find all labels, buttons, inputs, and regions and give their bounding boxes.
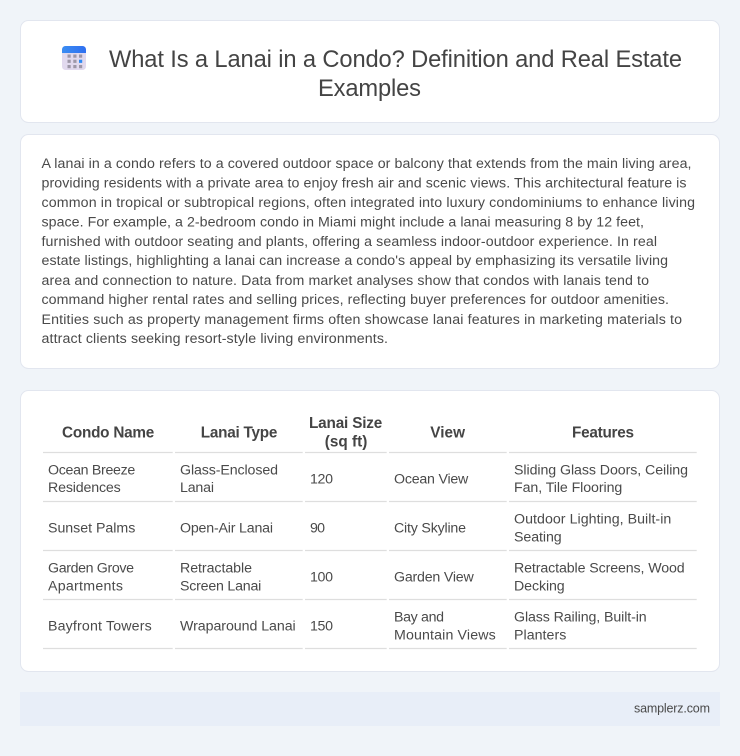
title: What Is a Lanai in a Condo? Definition and Real Estate — [109, 47, 682, 73]
table row: Ocean Breeze Residences: Ocean Breeze — [48, 462, 135, 478]
table row: Ocean Breeze Residences: Lanai — [180, 480, 214, 496]
footer credit: samplerz.com — [634, 702, 710, 716]
table row: Ocean Breeze Residences: 120 — [310, 472, 333, 488]
table header row: Features — [572, 425, 634, 442]
table row: Sunset Palms: Seating — [514, 530, 562, 546]
table header row: View — [430, 425, 465, 442]
panel: condo table — [20, 390, 720, 672]
table row: Garden Grove Apartments: Retractable Screens, Wood — [514, 560, 685, 576]
table row: Sunset Palms: City Skyline — [394, 521, 466, 537]
table row: Garden Grove Apartments: Apartments — [48, 578, 123, 594]
table row: Ocean Breeze Residences: Ocean View — [394, 472, 469, 488]
table row: Bayfront Towers: Planters — [514, 628, 566, 644]
table row: Sunset Palms — [48, 511, 671, 546]
table row: Sunset Palms: 90 — [310, 521, 325, 537]
text block: definition — [42, 156, 695, 347]
table header row — [62, 415, 634, 451]
table row: Ocean Breeze Residences: Glass-Enclosed — [180, 462, 278, 478]
table row: Bayfront Towers: Mountain Views — [394, 628, 496, 644]
title — [109, 47, 682, 102]
text block: definition: A lanai in a condo refers to a covered outdoor space or balcony that extends from the main living area, — [42, 156, 692, 172]
panel: definition paragraph — [20, 134, 720, 368]
text block: definition: providing residents with a private area to enjoy fresh air and scenic views. This architectural feature is — [42, 176, 686, 192]
table row: Bayfront Towers — [48, 610, 647, 644]
text block: definition: common in tropical or subtropical regions, often integrated into luxury condominiums to enhance living — [42, 195, 695, 211]
text block: definition: space. For example, a 2-bedroom condo in Miami might include a lanai measuring 8 by 12 feet, — [42, 214, 644, 230]
text block: definition: attract clients seeking resort-style living environments. — [42, 331, 388, 347]
title: Examples — [318, 76, 421, 102]
text block: definition: furnished with outdoor seating and plants, offering a seamless indoor-outdoor experience. In real — [42, 234, 657, 250]
table header row: Condo Name — [62, 425, 154, 442]
icon: calendar — [62, 46, 86, 70]
table row: Bayfront Towers: Glass Railing, Built-in — [514, 610, 647, 626]
table row: Garden Grove Apartments: Retractable — [180, 560, 252, 576]
table row: Garden Grove Apartments: Screen Lanai — [180, 578, 261, 594]
table row: Ocean Breeze Residences — [48, 462, 688, 496]
table row: Bayfront Towers: Bay and — [394, 610, 444, 626]
text block: definition: command higher rental rates and selling prices, reflecting buyer preferences for outdoor amenities. — [42, 292, 669, 308]
table row: Sunset Palms: Open-Air Lanai — [180, 521, 273, 537]
table row: Sunset Palms: Outdoor Lighting, Built-in — [514, 511, 671, 527]
table row: Garden Grove Apartments: Garden View — [394, 570, 474, 586]
table row: Garden Grove Apartments: 100 — [310, 570, 333, 586]
table header row: Lanai Type — [201, 425, 277, 442]
table row: Ocean Breeze Residences: Residences — [48, 480, 121, 496]
text block: definition: area and connection to nature. Data from market analyses show that condos with lanais tend to — [42, 273, 649, 289]
table row: Sunset Palms: Sunset Palms — [48, 521, 135, 537]
table row: Bayfront Towers: Bayfront Towers — [48, 618, 152, 634]
table row: Ocean Breeze Residences: Sliding Glass Doors, Ceiling — [514, 462, 688, 478]
table header row: (sq ft) — [325, 434, 367, 451]
panel: title card — [20, 20, 720, 122]
text block: definition: Entities such as property management firms often showcase lanai features in marketing materials to — [42, 312, 682, 328]
table row: Garden Grove Apartments — [48, 560, 685, 594]
table row: Garden Grove Apartments: Decking — [514, 578, 565, 594]
text block: definition: estate listings, highlighting a lanai can increase a condo's appeal by emphasizing its versatile living — [42, 253, 668, 269]
table row: Garden Grove Apartments: Garden Grove — [48, 560, 134, 576]
footer bar — [20, 692, 720, 726]
table row: Bayfront Towers: 150 — [310, 618, 333, 634]
table row: Bayfront Towers: Wraparound Lanai — [180, 618, 296, 634]
table row: Ocean Breeze Residences: Fan, Tile Flooring — [514, 480, 622, 496]
table header row: Lanai Size — [309, 415, 382, 432]
